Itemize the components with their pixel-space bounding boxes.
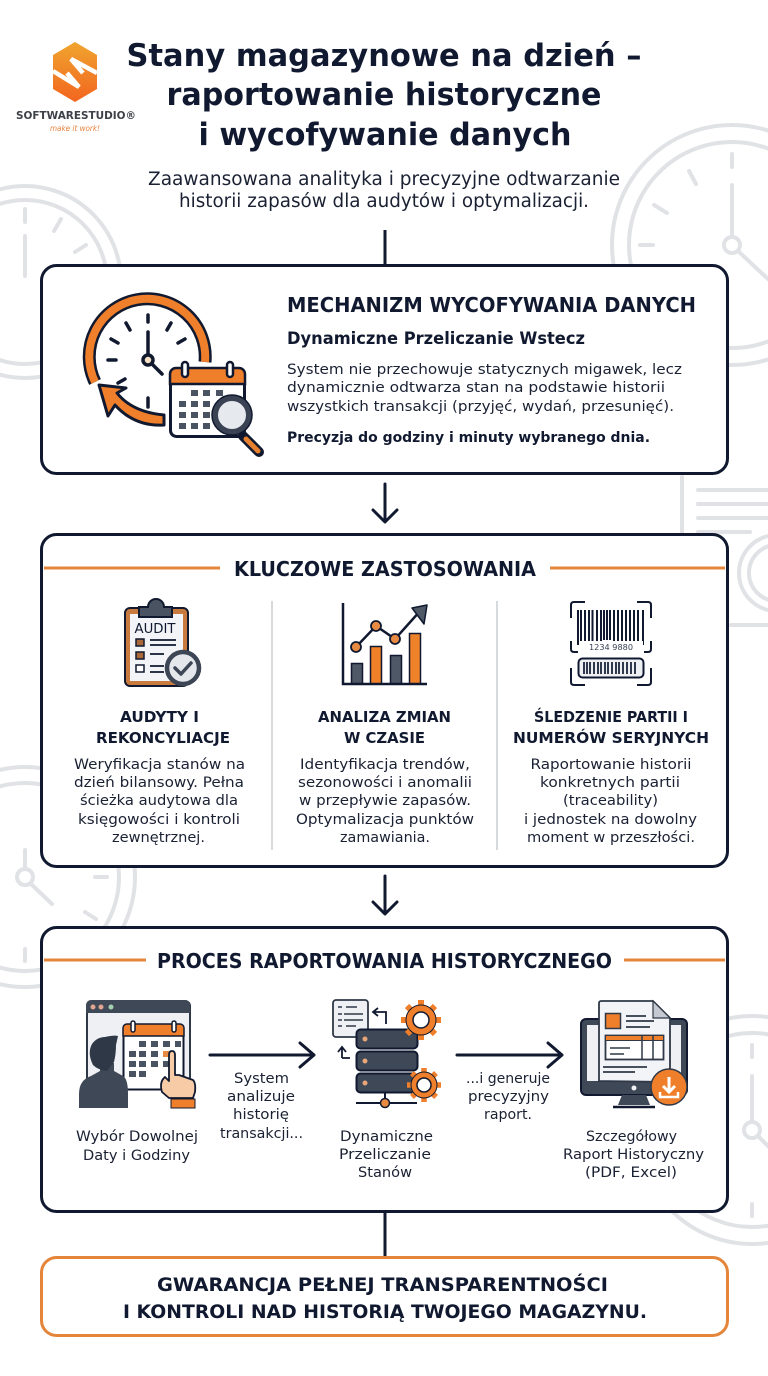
label: dynamic stock recalculation: Dynamiczne xyxy=(340,1129,433,1145)
column: audits: zewnętrznej. xyxy=(112,830,205,846)
column: change analysis: w przepływie zapasów. xyxy=(299,793,471,809)
panel: guarantee callout: I KONTROLI NAD HISTORIĄ TWOJEGO MAGAZYNU. xyxy=(123,1301,647,1323)
label: dynamic stock recalculation: Stanów xyxy=(358,1165,412,1181)
label: system analyses: analizuje xyxy=(227,1089,295,1105)
column: batch and serial tracking: NUMERÓW SERYJNYCH xyxy=(513,728,709,747)
column: change analysis: W CZASIE xyxy=(344,729,425,747)
text block: mechanism description: dynamicznie odtwarza stan na podstawie historii xyxy=(287,380,665,396)
panel: data rollback mechanism xyxy=(42,266,728,474)
title: raportowanie historyczne xyxy=(166,77,602,113)
column: audits: księgowości i kontroli xyxy=(78,812,240,828)
text: precision note: Precyzja do godziny i minuty wybranego dnia. xyxy=(287,430,650,446)
title xyxy=(126,38,642,153)
column: change analysis: Identyfikacja trendów, xyxy=(300,757,470,773)
icon: person choosing date xyxy=(79,1000,195,1108)
label: choose date and time: Daty i Godziny xyxy=(83,1148,190,1164)
icon: trend chart xyxy=(343,603,427,684)
column: audits: dzień bilansowy. Pełna xyxy=(74,775,244,791)
title: i wycofywanie danych xyxy=(198,117,572,153)
icon: clock with calendar and magnifier xyxy=(89,299,259,452)
icon: barcode scanner frame: 1234 9880 xyxy=(589,643,633,652)
label: dynamic stock recalculation: Przeliczanie xyxy=(339,1147,431,1163)
column: batch and serial tracking: moment w przeszłości. xyxy=(527,830,695,846)
label: system analyses xyxy=(220,1071,303,1142)
column: batch and serial tracking: Raportowanie historii xyxy=(530,757,692,773)
label: generates report: raport. xyxy=(484,1107,532,1123)
label: choose date and time: Wybór Dowolnej xyxy=(76,1129,198,1145)
subtitle: historii zapasów dla audytów i optymalizacji. xyxy=(179,191,589,212)
heading: process: PROCES RAPORTOWANIA HISTORYCZNEGO xyxy=(157,949,612,973)
arrow: down to process xyxy=(373,876,397,914)
label: system analyses: System xyxy=(234,1071,289,1087)
column: audits: Weryfikacja stanów na xyxy=(74,757,245,773)
label: detailed historical report: (PDF, Excel) xyxy=(585,1165,677,1181)
label: dynamic stock recalculation xyxy=(339,1129,433,1181)
label: generates report: precyzyjny xyxy=(468,1089,549,1105)
column: batch and serial tracking: (traceability) xyxy=(563,793,658,809)
column: batch and serial tracking: ŚLEDZENIE PARTII I xyxy=(534,707,688,726)
label: detailed historical report: Szczegółowy xyxy=(586,1129,677,1145)
text block: mechanism description: wszystkich transakcji (przyjęć, wydań, przesunięć). xyxy=(287,399,674,415)
heading: key uses: KLUCZOWE ZASTOSOWANIA xyxy=(234,557,536,581)
subtitle: Zaawansowana analityka i precyzyjne odtwarzanie xyxy=(148,169,620,190)
panel: key uses xyxy=(42,534,728,866)
title: Stany magazynowe na dzień – xyxy=(126,38,642,74)
icon: audit clipboard xyxy=(125,599,199,686)
text block: mechanism description: System nie przechowuje statycznych migawek, lecz xyxy=(287,362,682,378)
column: audits: REKONCYLIACJE xyxy=(96,729,230,747)
label: generates report: ...i generuje xyxy=(466,1071,550,1087)
label: system analyses: transakcji... xyxy=(220,1126,303,1142)
column: audits xyxy=(74,708,245,846)
column: change analysis: sezonowości i anomalii xyxy=(298,775,472,791)
logo: Software Studio xyxy=(16,42,136,133)
panel: historical reporting process xyxy=(42,928,728,1212)
icon: server with gears xyxy=(333,1000,441,1108)
heading: mechanism: MECHANIZM WYCOFYWANIA DANYCH xyxy=(287,293,696,317)
connector line: subtitle to mechanism xyxy=(384,230,386,266)
icon: monitor with report and download xyxy=(581,1001,687,1107)
text block: mechanism description xyxy=(287,362,682,415)
panel: guarantee callout: GWARANCJA PEŁNEJ TRANSPARENTNOŚCI xyxy=(157,1272,608,1296)
logo: Software Studio: make it work! xyxy=(50,124,100,133)
label: generates report xyxy=(466,1071,550,1123)
label: detailed historical report xyxy=(563,1129,704,1181)
panel: guarantee callout xyxy=(42,1258,728,1336)
column: change analysis: Optymalizacja punktów xyxy=(296,812,474,828)
connector line: process to guarantee xyxy=(384,1213,386,1257)
column: batch and serial tracking xyxy=(513,707,709,846)
column: change analysis: zamawiania. xyxy=(340,830,430,846)
icon: audit clipboard: AUDIT xyxy=(134,622,176,637)
subtitle xyxy=(148,169,620,212)
column: audits: AUDYTY I xyxy=(120,708,199,726)
logo: Software Studio: SOFTWARESTUDIO® xyxy=(16,110,136,122)
subheading: dynamic recalculation: Dynamiczne Przeliczanie Wstecz xyxy=(287,329,585,348)
column: batch and serial tracking: konkretnych partii xyxy=(540,775,680,791)
arrow: down to key uses xyxy=(373,484,397,522)
column: change analysis: ANALIZA ZMIAN xyxy=(318,708,451,726)
column: audits: ścieżka audytowa dla xyxy=(80,793,238,809)
arrow: recalculation to report xyxy=(457,1043,562,1067)
arrow: date to recalculation xyxy=(210,1043,314,1067)
icon: barcode scanner frame xyxy=(571,602,651,685)
label: detailed historical report: Raport Historyczny xyxy=(563,1147,704,1163)
column: batch and serial tracking: i jednostek na dowolny xyxy=(524,812,697,828)
label: choose date and time xyxy=(76,1129,198,1164)
column: change analysis xyxy=(296,708,474,846)
label: system analyses: historię xyxy=(233,1107,289,1123)
